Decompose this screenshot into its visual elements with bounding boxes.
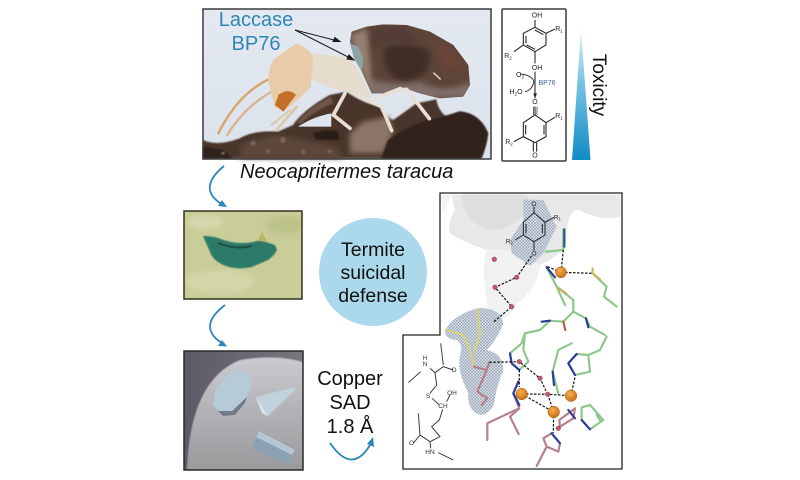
label: Laccase BP76: [219, 9, 293, 55]
quinone in density: 2: [511, 240, 514, 245]
termite abdomen: [350, 24, 470, 98]
lower residues: [446, 310, 607, 466]
photo panel: termite: [203, 9, 491, 159]
quinone in density: 1: [559, 216, 562, 221]
panel: chemical reaction: O: [532, 152, 538, 160]
quinone in density: R: [554, 214, 559, 221]
covalent adduct skeletal formula: [408, 343, 457, 460]
arrow: crystals to structure: [330, 437, 374, 460]
label: Copper SAD 1.8 Å: 1.8 Å: [327, 415, 374, 438]
label: Copper SAD 1.8 Å: Copper: [317, 368, 383, 390]
termite antennae: [218, 77, 278, 135]
panel: chemical reaction: 2: [521, 74, 524, 80]
quinone in density: O: [531, 251, 537, 258]
label: Copper SAD 1.8 Å: [317, 368, 383, 438]
circle: Termite suicidal defense: Termite: [341, 239, 405, 261]
covalent adduct skeletal formula: OH: [447, 390, 457, 397]
panel: chemical reaction: O: [532, 99, 538, 106]
arrow: termite to extract: [210, 166, 227, 207]
covalent adduct skeletal formula: N: [423, 361, 428, 368]
panel: chemical reaction: OH: [532, 65, 542, 72]
panel: chemical reaction: OH: [532, 12, 542, 20]
covalent adduct skeletal formula: HN: [425, 449, 435, 456]
panel: chemical reaction: 1: [560, 28, 563, 34]
water atoms: [492, 257, 561, 431]
circle: Termite suicidal defense: suicidal: [340, 262, 406, 284]
head: [268, 43, 313, 112]
toxicity triangle: [572, 28, 590, 160]
species name: Neocapritermes taracua: [240, 161, 453, 183]
panel: chemical reaction: H: [509, 89, 515, 96]
quinone in density: [506, 199, 562, 266]
circle: Termite suicidal defense: defense: [338, 285, 408, 307]
infographic canvas: [183, 8, 623, 471]
photo: protein crystals: [184, 351, 303, 470]
arrow: extract to crystals: [210, 305, 227, 346]
panel: chemical reaction: 2: [510, 142, 513, 146]
circle: Termite suicidal defense: [319, 218, 427, 326]
covalent adduct skeletal formula: S: [426, 393, 431, 400]
panel: chemical reaction: 2: [509, 56, 512, 60]
photo: green termite extract: [184, 211, 305, 299]
covalent adduct skeletal formula: CH: [438, 403, 448, 410]
termite body: [268, 43, 429, 131]
quinone in density: R: [506, 238, 511, 245]
ground: [203, 92, 488, 158]
upper residues: [525, 229, 617, 335]
copper atoms: [516, 267, 577, 418]
panel: chemical reaction: BP76: [538, 80, 556, 87]
lower density mesh: [445, 308, 503, 415]
panel: chemical reaction: 2: [515, 92, 518, 96]
label: Copper SAD 1.8 Å: SAD: [329, 392, 371, 414]
panel: protein structure: [403, 193, 622, 469]
panel: chemical reaction: O: [516, 72, 521, 79]
thorax: [312, 53, 372, 98]
panel: chemical reaction: R: [555, 26, 560, 33]
arrows: laccase pointers: [295, 30, 354, 60]
label: Laccase BP76: Laccase: [219, 9, 293, 31]
covalent adduct skeletal formula: H: [423, 356, 427, 362]
panel: chemical reaction: O: [517, 89, 523, 96]
panel: chemical reaction: R: [555, 113, 560, 120]
legs: [272, 89, 429, 131]
panel outline: [403, 193, 622, 469]
panel: chemical reaction: R: [505, 139, 510, 146]
covalent adduct skeletal formula: O: [451, 367, 457, 374]
panel: chemical reaction: 1: [560, 116, 563, 120]
photo frame: [203, 9, 491, 159]
label: Toxicity: Toxicity: [588, 54, 609, 117]
panel: chemical reaction: R: [504, 53, 509, 60]
label: Laccase BP76: BP76: [232, 33, 280, 55]
covalent adduct skeletal formula: O: [409, 440, 414, 447]
protein surface: [441, 195, 621, 319]
panel: chemical reaction: [502, 9, 566, 161]
hydrogen bonds: [489, 250, 593, 433]
quinone in density: O: [531, 201, 537, 208]
